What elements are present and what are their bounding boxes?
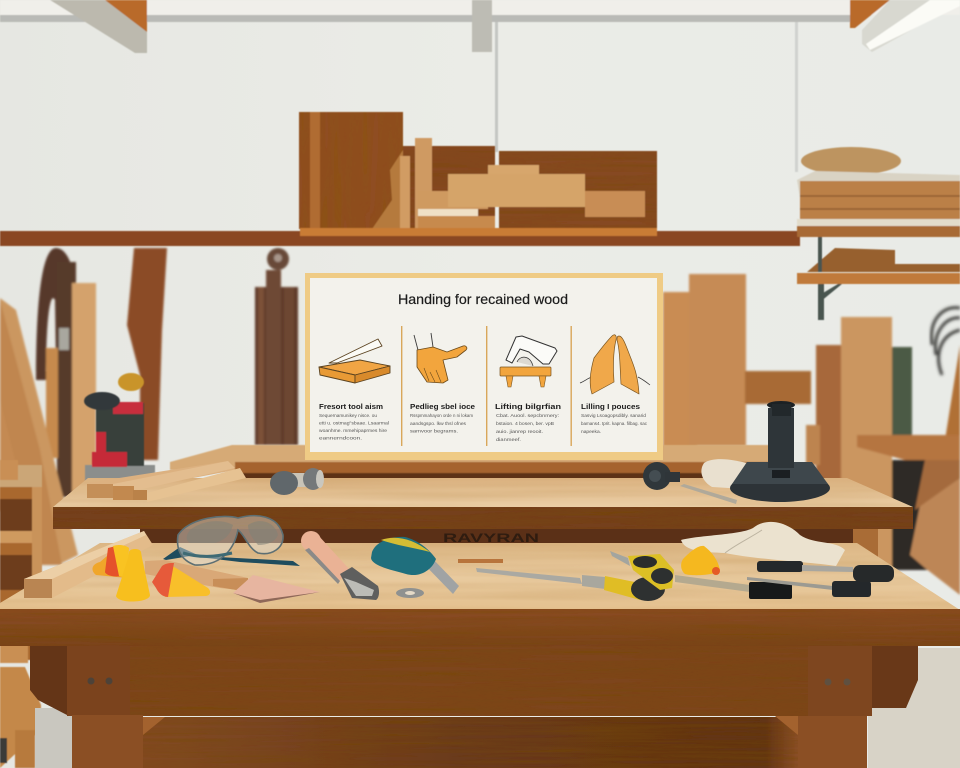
ear plug cones [93, 545, 210, 602]
cordless drill on stool [84, 373, 155, 495]
leaning boards on the left [0, 248, 298, 565]
poster background [310, 278, 657, 452]
body text: aandsgspo. lkw thsl ofnes [410, 421, 467, 426]
body text: Cbat. Auool. sepcbnmery: [496, 413, 559, 418]
heading: Lilling I pouces [581, 402, 640, 411]
front bench top [0, 543, 960, 646]
body text: Sasvig Lsoagopsdibly. sanarid [581, 413, 646, 418]
column 4: pressed hands [580, 335, 650, 434]
poster frame [305, 273, 663, 460]
body text [410, 413, 473, 434]
instruction poster [305, 273, 663, 460]
lumber offcut [24, 531, 153, 598]
wall rail and shelf with reclaimed boards [0, 112, 800, 246]
icon: open hand [414, 333, 467, 383]
apron lettering: RAVYRAN [443, 533, 539, 545]
front bench apron and legs [30, 646, 918, 768]
ceiling with beams and light [0, 0, 960, 172]
dumbbell [270, 468, 324, 495]
body text [319, 413, 389, 440]
body text: Rsspmmahayon orde n ni lokam [410, 413, 473, 418]
sanding roller [301, 531, 379, 600]
icon: hands over small table [500, 336, 557, 387]
body text: samvoor begrams. [410, 428, 458, 434]
body text: bamans4. tprit. kapna. filbag. sac [581, 421, 648, 426]
back workbench [170, 445, 770, 479]
stacked boards on the right [663, 274, 960, 595]
column 1: board and blade [319, 339, 390, 440]
boards on middle bench [87, 461, 246, 502]
yellow plug [681, 546, 720, 575]
body text: dianmeef. [496, 437, 521, 442]
body text: eannerndcoon. [319, 436, 362, 440]
cloth rag [681, 522, 845, 566]
icon: pressed hands [580, 335, 650, 394]
column 3: lifting device [495, 336, 561, 442]
teal handled driver [371, 537, 459, 598]
heading: Fresort tool aism [319, 402, 383, 411]
body text: auio. jianrep reooit. [496, 429, 543, 434]
screwdrivers [476, 551, 894, 601]
left cabinet [0, 460, 42, 768]
lower shelf of front bench [143, 717, 798, 768]
body text [496, 413, 559, 442]
right wall shelves [797, 147, 960, 320]
heading: Lifting bilgrfian [495, 402, 561, 411]
body text: bstaion. 4 bosen, ber. vpB [496, 421, 554, 426]
icon: board with blade [319, 339, 390, 383]
body text: woanhme. mmehipaprmes hire [319, 428, 387, 433]
wood block and sandpaper [145, 560, 320, 603]
floor [35, 648, 960, 768]
body text: napeeka. [581, 429, 601, 434]
safety glasses [163, 516, 300, 566]
column 2: hand [410, 333, 475, 434]
middle workbench [53, 478, 913, 560]
body text [581, 413, 648, 434]
heading: Pedlieg sbel ioce [410, 402, 475, 411]
poster title: Handing for recained wood [398, 291, 568, 307]
body text: Sequernamunikey nisce. ou [319, 413, 377, 418]
body text: etti u. ostmag"sbaae. Lsaarmal [319, 420, 389, 426]
sander on middle bench [643, 401, 830, 504]
